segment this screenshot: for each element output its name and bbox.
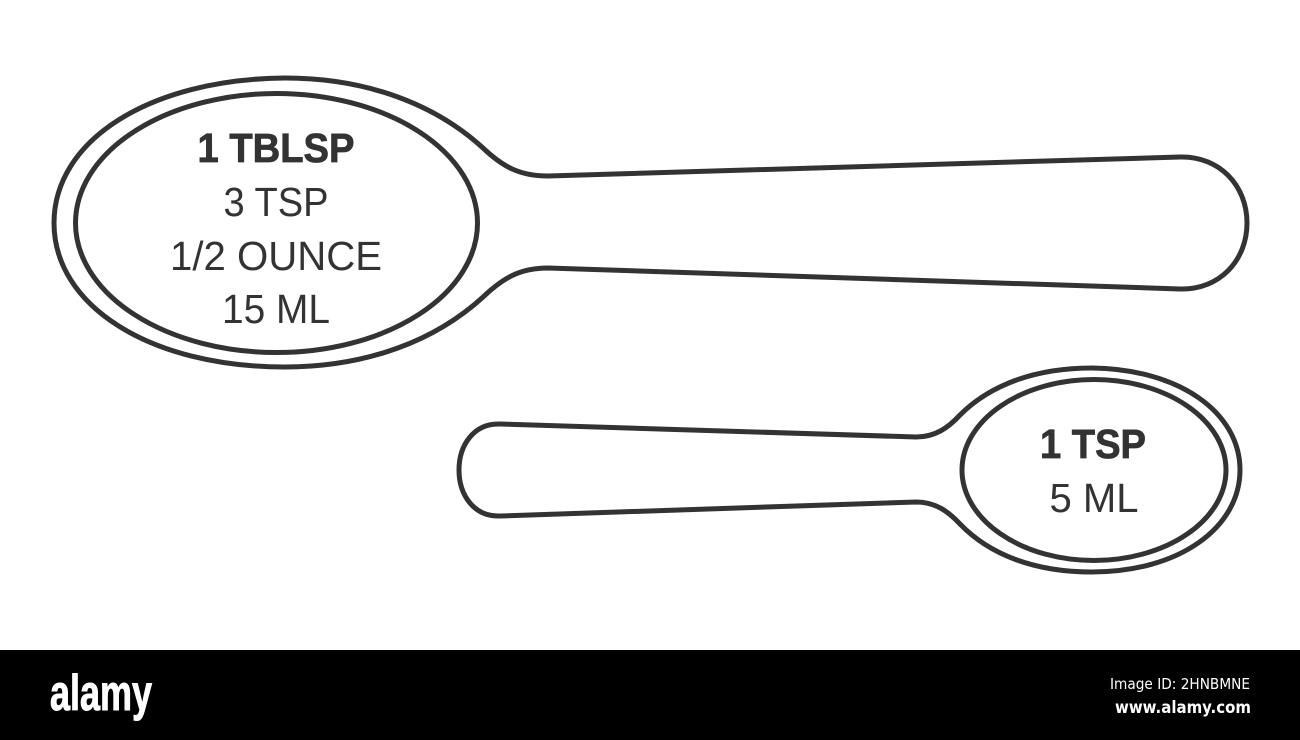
teaspoon outline (459, 368, 1240, 572)
label: 1/2 OUNCE: 1/2 OUNCE (170, 233, 382, 279)
label: 3 TSP: 3 TSP (224, 179, 328, 225)
black bar (0, 650, 1300, 740)
tablespoon bowl (76, 94, 478, 352)
tablespoon outline (54, 78, 1247, 367)
teaspoon text (1040, 421, 1146, 521)
label: 5 ML: 5 ML (1050, 475, 1138, 521)
watermark footer bar (0, 650, 1300, 740)
label: 1 TSP: 1 TSP (1040, 421, 1146, 467)
label: 15 ML: 15 ML (222, 286, 330, 332)
small teaspoon (459, 368, 1240, 572)
image id: Image ID: 2HNBMNE (1110, 675, 1250, 693)
website: www.alamy.com (1115, 698, 1251, 718)
alamy logo: alamy (50, 665, 152, 721)
label: 1 TBLSP: 1 TBLSP (198, 125, 354, 171)
teaspoon bowl (962, 380, 1226, 560)
large tablespoon (54, 78, 1247, 367)
tablespoon text (170, 125, 382, 332)
